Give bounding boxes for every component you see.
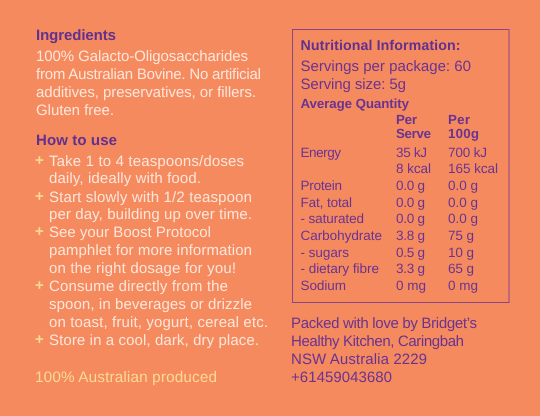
row: sodium	[300, 278, 478, 293]
row: protein: 0.0 g	[396, 178, 425, 193]
list item: pamphlet: See your Boost Protocol	[49, 224, 211, 241]
row: energy	[300, 145, 498, 176]
heading: nutritional information: Nutritional Information:	[300, 38, 460, 54]
row: dietary fibre: 3.3 g	[396, 261, 425, 276]
text: servings: Servings per package: 60	[300, 58, 471, 75]
text block: packer address: +61459043680	[291, 369, 392, 386]
row: energy: 8 kcal	[396, 161, 431, 176]
list item: dosage: daily, ideally with food.	[49, 170, 201, 187]
row: fat total: Fat, total	[300, 195, 352, 210]
list item: start slowly: Start slowly with 1/2 teaspoon	[49, 189, 252, 206]
text block: packer address	[291, 315, 477, 386]
row: fat total: 0.0 g	[396, 195, 425, 210]
list item: consume: +	[35, 277, 44, 294]
text: australian produced: 100% Australian produced	[35, 369, 217, 386]
row: fat total	[300, 195, 478, 210]
list item: storage: +	[35, 331, 44, 348]
list item: consume: on toast, fruit, yogurt, cereal etc.	[49, 314, 268, 331]
list item: dosage	[35, 152, 244, 187]
row: dietary fibre: 65 g	[448, 261, 474, 276]
list item: consume: spoon, in beverages or drizzle	[49, 296, 252, 313]
text block: ingredients description: 100% Galacto-Oligosaccharides	[36, 48, 248, 65]
row: protein	[300, 178, 478, 193]
text block: packer address: NSW Australia 2229	[291, 351, 427, 368]
list item: consume: Consume directly from the	[49, 278, 228, 295]
list item: start slowly	[35, 188, 252, 223]
row: sodium: 0 mg	[396, 278, 426, 293]
row: dietary fibre: - dietary fibre	[300, 261, 379, 276]
row: sugars: 0.5 g	[396, 245, 425, 260]
list item: pamphlet: on the right dosage for you!	[49, 260, 236, 277]
row: carbohydrate: Carbohydrate	[300, 228, 382, 243]
row: saturated	[300, 211, 478, 226]
row: sugars: 10 g	[448, 245, 474, 260]
text: servings	[300, 58, 471, 93]
list item: dosage: Take 1 to 4 teaspoons/doses	[49, 153, 244, 170]
row: sodium: Sodium	[300, 278, 346, 293]
row: energy: 700 kJ	[448, 145, 487, 160]
heading: how to use: How to use	[36, 132, 117, 149]
panel border	[292, 30, 509, 302]
list item: dosage: +	[35, 152, 44, 169]
list item: consume	[35, 277, 268, 331]
list item: start slowly: per day, building up over time.	[49, 206, 252, 223]
row: saturated: 0.0 g	[448, 211, 478, 226]
table header: Average Quantity	[300, 96, 410, 111]
heading: ingredients: Ingredients	[36, 27, 116, 44]
list item: pamphlet: +	[35, 223, 44, 240]
row: energy: Energy	[300, 145, 341, 160]
text block: ingredients description: from Australian Bovine. No artificial	[36, 66, 261, 83]
row: dietary fibre	[300, 261, 474, 276]
row: carbohydrate	[300, 228, 474, 243]
list item: pamphlet	[35, 223, 252, 277]
text block: packer address: Packed with love by Bridget’s	[291, 315, 477, 332]
text block: ingredients description: additives, preservatives, or fillers.	[36, 84, 256, 101]
table header: Per	[396, 112, 417, 127]
row: carbohydrate: 3.8 g	[396, 228, 425, 243]
row: protein: Protein	[300, 178, 342, 193]
row: sugars	[300, 245, 474, 260]
row: fat total: 0.0 g	[448, 195, 478, 210]
text: servings: Serving size: 5g	[300, 76, 406, 93]
row: energy: 35 kJ	[396, 145, 427, 160]
table header	[300, 96, 479, 141]
table header: Serve	[396, 126, 431, 141]
list: usage instructions	[35, 152, 268, 349]
panel: ingredients and usage	[35, 27, 268, 386]
row: saturated: 0.0 g	[396, 211, 425, 226]
text block: ingredients description	[36, 48, 261, 119]
row: sugars: - sugars	[300, 245, 349, 260]
list item: storage: Store in a cool, dark, dry place.	[49, 332, 259, 349]
list item: start slowly: +	[35, 188, 44, 205]
list item: pamphlet: pamphlet for more information	[49, 242, 252, 259]
text block: packer address: Healthy Kitchen, Caringbah	[291, 333, 464, 350]
row: energy: 165 kcal	[448, 161, 498, 176]
row: protein: 0.0 g	[448, 178, 478, 193]
row: carbohydrate: 75 g	[448, 228, 474, 243]
panel: nutritional information	[292, 30, 509, 302]
table header: Per	[448, 112, 470, 127]
row: saturated: - saturated	[300, 211, 364, 226]
table header: 100g	[448, 126, 479, 141]
table: nutrition values	[300, 96, 498, 293]
row: sodium: 0 mg	[448, 278, 478, 293]
text block: ingredients description: Gluten free.	[36, 102, 114, 119]
